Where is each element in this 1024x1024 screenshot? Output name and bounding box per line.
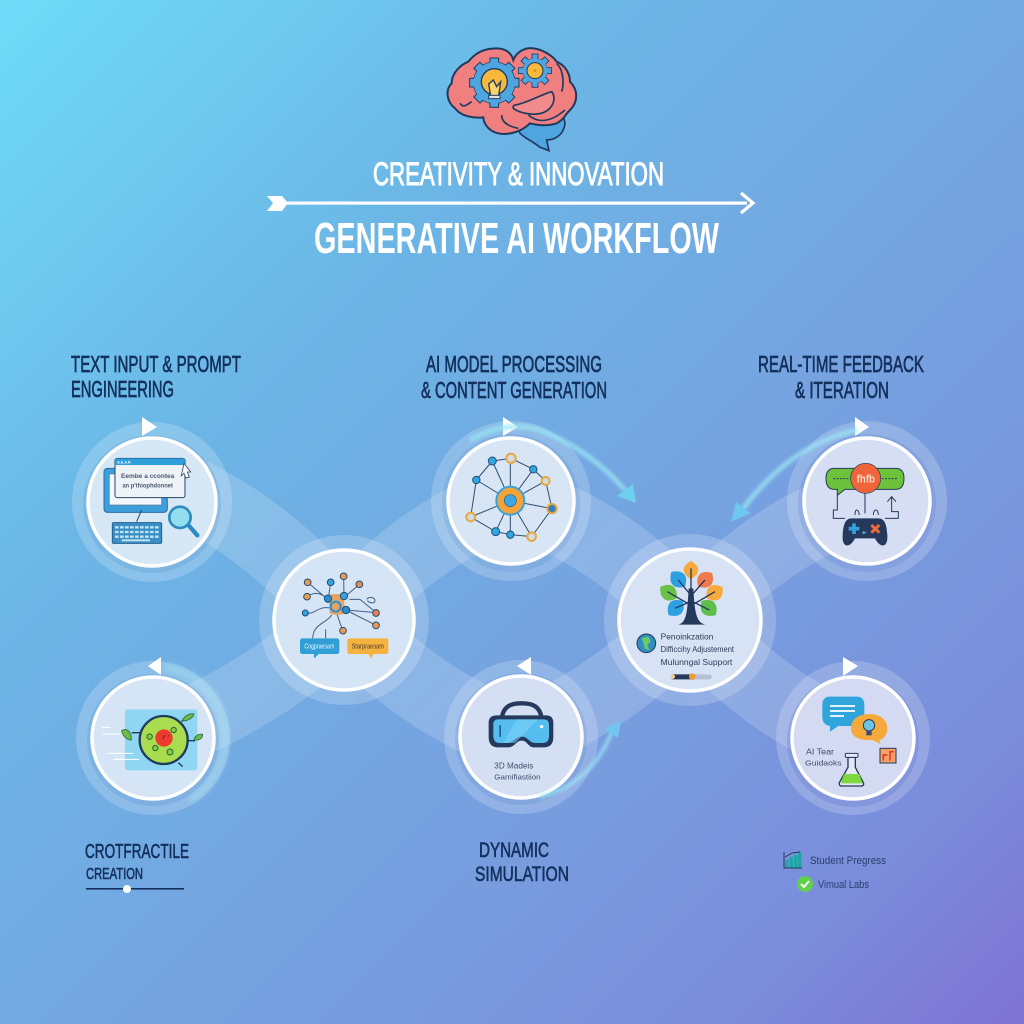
legend: virtual labs: Vimual Labs [818, 879, 869, 891]
icon: computer with prompt window: Eembe a ccontea [121, 473, 175, 480]
legend: virtual labs [797, 876, 869, 892]
arrow: feedback to hub [731, 430, 857, 522]
icon: neural network [466, 454, 557, 541]
node: creation [76, 657, 230, 815]
icon: tree, globe, settings list: Difficcihy Adjustement [661, 644, 735, 654]
icon: computer with prompt window: E.E.A.N [117, 460, 131, 464]
heading: text input: TEXT INPUT & PROMPT [71, 351, 241, 377]
icon: VR headset: Gamifiastiion [494, 773, 541, 782]
heading: dynamic simulation: SIMULATION [475, 863, 569, 886]
heading: feedback: REAL-TIME FEEDBACK [758, 351, 924, 377]
heading: creation: CROTFRACTILE [85, 841, 189, 863]
icon: VR headset: 3D Madeis [494, 762, 533, 771]
heading: dynamic simulation [475, 839, 569, 886]
heading: text input: ENGINEERING [71, 376, 174, 402]
icon: tree, globe, settings list: Mulunngal Support [661, 657, 733, 667]
legend: student progress: Student Pregress [810, 855, 886, 867]
slider under creation [86, 885, 184, 893]
node: AI model [431, 417, 591, 581]
icon: feedback bubbles and game controller [826, 463, 904, 545]
heading: creativity and innovation: CREATIVITY & INNOVATION [373, 156, 664, 192]
node: hub right personalization [604, 534, 776, 706]
legend: student progress [784, 852, 886, 868]
node: AI tutor guidance [776, 657, 930, 815]
icon: network with speech bubbles: Starpraesam [352, 643, 384, 650]
heading: dynamic simulation: DYNAMIC [479, 839, 549, 862]
node: dynamic simulation [444, 657, 598, 814]
icon: chat bubbles and flask: Guidaoks [805, 758, 842, 767]
icon: feedback bubbles and game controller: fhfb [857, 474, 875, 486]
heading: feedback: & ITERATION [795, 377, 889, 403]
icon: computer with prompt window: an p'thiophdonnet [122, 482, 174, 489]
node: hub left concept network [259, 535, 429, 705]
title brain icon [448, 48, 576, 151]
arrow: AI model to hub [470, 427, 636, 503]
icon: chat bubbles and flask [805, 697, 896, 786]
heading: creation: CREATION [86, 866, 143, 883]
heading: creation [85, 841, 189, 883]
icon: network with speech bubbles [300, 573, 388, 659]
icon: computer with prompt window [104, 458, 197, 543]
icon: green cell [102, 709, 203, 770]
connecting bands between stages [152, 478, 867, 738]
icon: VR headset [489, 703, 553, 782]
node: real-time feedback [787, 417, 947, 581]
title arrow [267, 193, 753, 213]
node: text input [72, 417, 232, 582]
main title: GENERATIVE AI WORKFLOW [314, 214, 719, 263]
heading: feedback [758, 351, 924, 403]
heading: model processing: & CONTENT GENERATION [421, 377, 607, 403]
icon: chat bubbles and flask: AI Tear [806, 748, 834, 757]
icon: network with speech bubbles: Cogpraesam [304, 643, 334, 650]
icon: tree, globe, settings list [637, 561, 735, 680]
heading: model processing: AI MODEL PROCESSING [426, 351, 602, 377]
arrow: simulation to hub [540, 721, 621, 797]
heading: model processing [421, 351, 607, 403]
heading: text input [71, 351, 241, 402]
icon: tree, globe, settings list: Penoinkzation [661, 632, 714, 642]
